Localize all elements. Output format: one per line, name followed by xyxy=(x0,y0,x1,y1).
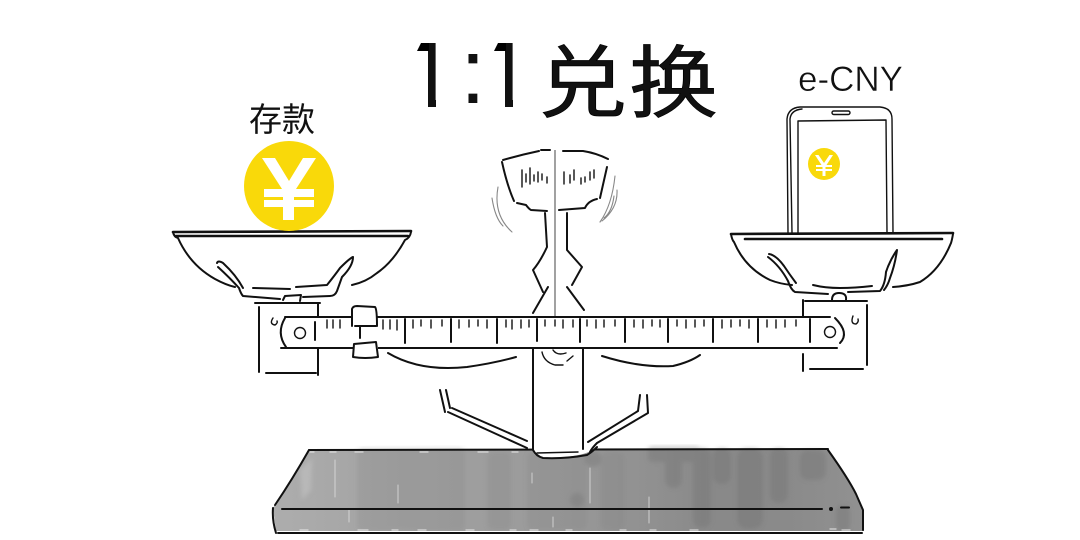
coin: e-CNY xyxy=(808,148,840,180)
sliders xyxy=(352,306,378,358)
title: 1 xyxy=(481,23,533,127)
phone xyxy=(787,107,893,233)
title xyxy=(398,19,718,128)
title: 兑换 xyxy=(538,40,718,128)
right post block xyxy=(803,293,867,371)
scale base xyxy=(273,446,864,533)
left pan xyxy=(173,231,411,301)
title: : xyxy=(460,19,486,123)
beam arcs xyxy=(388,353,700,368)
center column xyxy=(533,348,597,458)
left post block xyxy=(255,303,320,375)
label: deposit: 存款 xyxy=(249,101,315,138)
title: 1 xyxy=(404,23,456,127)
scale feet xyxy=(440,390,648,452)
gauge xyxy=(492,150,617,316)
label: e-CNY: e-CNY xyxy=(798,60,903,99)
right pan xyxy=(731,233,953,294)
coin: yuan xyxy=(244,141,334,231)
beam with graduations xyxy=(281,317,844,348)
